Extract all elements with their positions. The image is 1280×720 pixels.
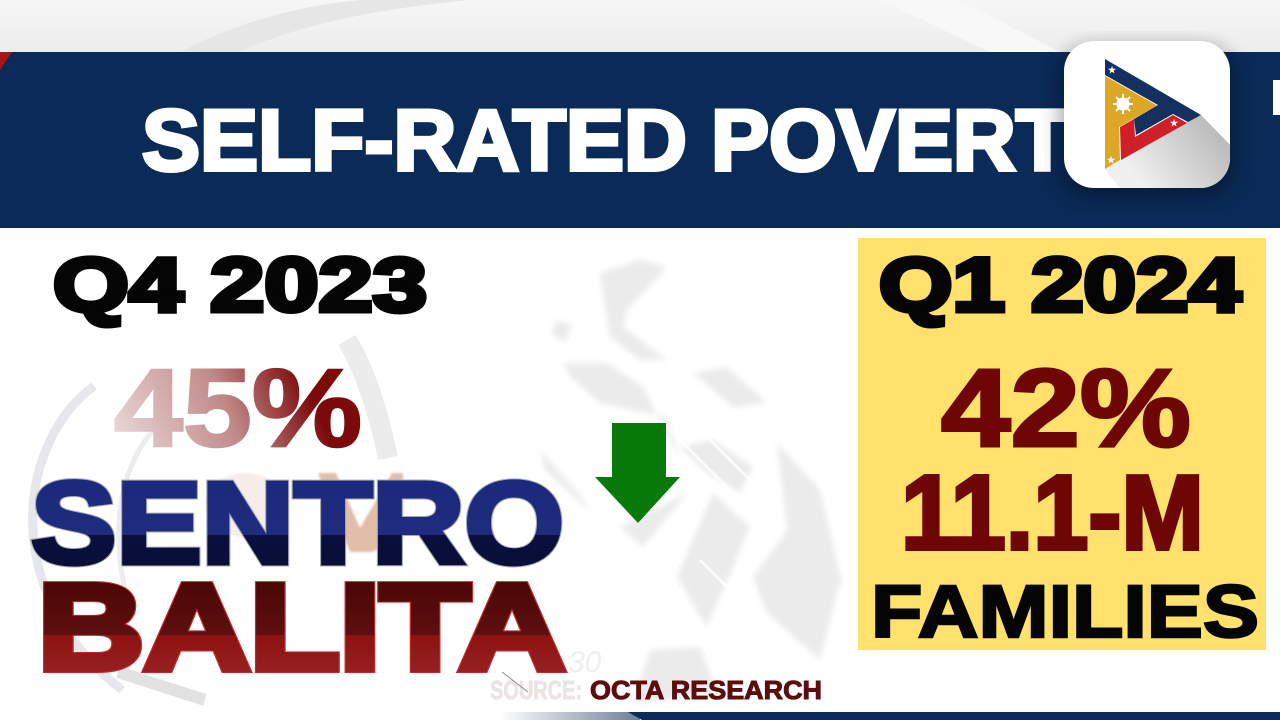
logo: Sentro Balita wordmark: BALITA bbox=[38, 559, 565, 695]
figure: 45 percent: 45% bbox=[114, 347, 362, 470]
icon: stars: ★ bbox=[1107, 155, 1116, 165]
background globe rings bbox=[33, 340, 388, 700]
icon: stars: ★ bbox=[1108, 65, 1117, 75]
figure: 42 percent: 42% bbox=[941, 347, 1191, 470]
source line bbox=[490, 675, 822, 705]
bottom strip bbox=[500, 712, 1280, 720]
label: families: FAMILIES bbox=[871, 570, 1259, 653]
arrow: green down bbox=[595, 423, 680, 523]
source line: SOURCE: bbox=[490, 675, 582, 705]
source line: OCTA RESEARCH bbox=[590, 675, 822, 705]
icon: stars bbox=[1107, 65, 1179, 165]
background map streaks bbox=[640, 370, 790, 650]
logo: Sentro Balita wordmark: SENTRO bbox=[31, 458, 564, 588]
icon: stars: ★ bbox=[1170, 118, 1179, 128]
logo: Sentro Balita wordmark: SENTRO bbox=[31, 458, 564, 588]
logo: Sentro Balita wordmark bbox=[31, 458, 565, 695]
panel: title band bbox=[0, 52, 1280, 228]
heading: Q1 2024: Q1 2024 bbox=[879, 243, 1241, 328]
panel: Q4 2023 bbox=[53, 243, 427, 552]
figure: 11.1-M: 11.1-M bbox=[901, 454, 1204, 572]
faded year mark: 30 bbox=[568, 646, 602, 679]
icon: sun bbox=[1113, 94, 1133, 114]
heading: Q4 2023: Q4 2023 bbox=[53, 243, 427, 328]
heading: self-rated poverty: SELF-RATED POVERTY bbox=[142, 93, 1127, 189]
background map of the Philippines bbox=[540, 260, 843, 703]
logo: PTV app icon bbox=[1060, 41, 1240, 196]
panel: Q1 2024 bbox=[858, 238, 1266, 653]
logo: Sentro Balita wordmark: BALITA bbox=[38, 559, 565, 695]
hidden figure remnant bbox=[205, 473, 403, 552]
